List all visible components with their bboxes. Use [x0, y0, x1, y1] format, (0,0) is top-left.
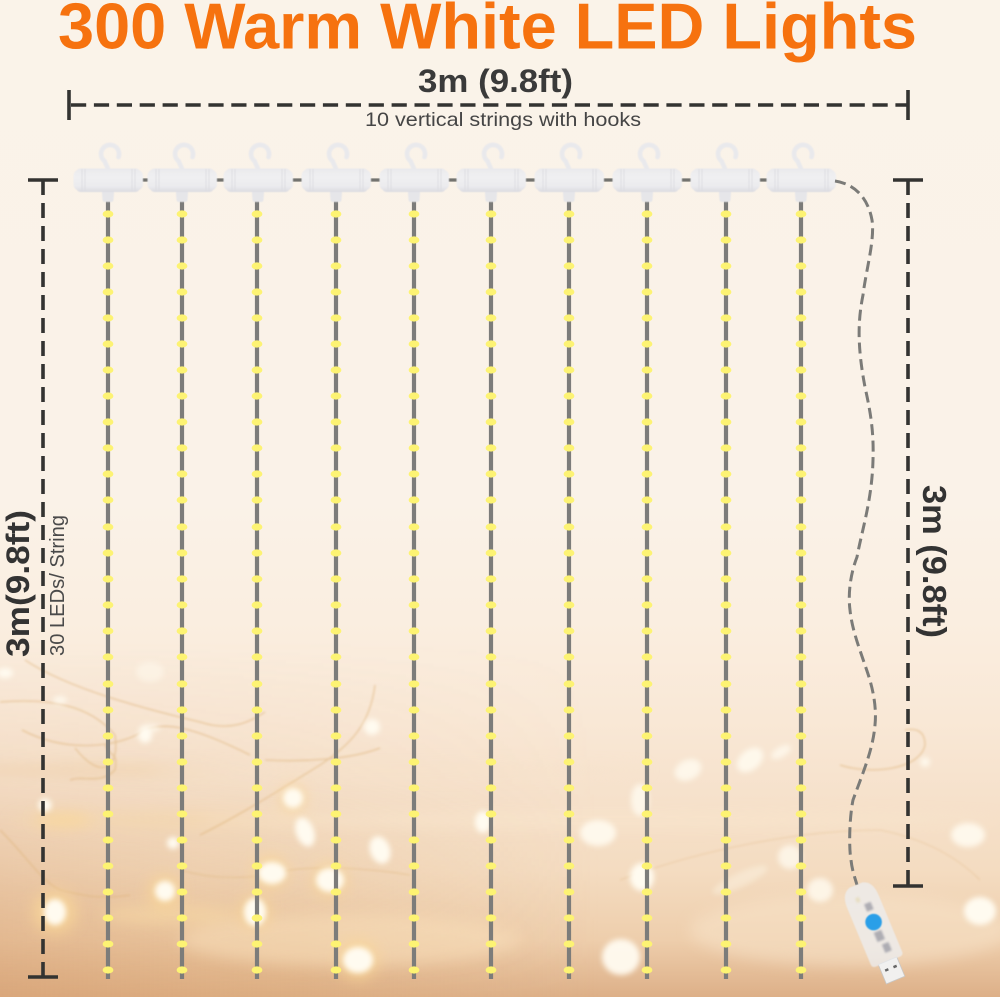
translucent controller body	[840, 878, 904, 968]
LED string 4	[331, 200, 341, 979]
LED string 3	[252, 200, 262, 979]
horizontal dimension arrow	[69, 90, 908, 120]
LED string 5	[409, 200, 419, 979]
USB plug	[878, 957, 905, 984]
LED string 7	[564, 200, 574, 979]
hook connector 10	[766, 145, 836, 202]
width label: 3m (9.8ft): 3m (9.8ft)	[418, 63, 573, 99]
LED string 8	[642, 200, 652, 979]
hook connector 5	[380, 145, 449, 202]
hook connector 9	[690, 145, 760, 202]
USB controller with blue button	[840, 878, 911, 987]
right label: 3m (9.8ft): 3m (9.8ft)	[916, 485, 953, 638]
right vertical dimension arrow	[893, 180, 923, 886]
left label: 3m(9.8ft): 3m(9.8ft)	[0, 510, 36, 657]
hook connector 8	[612, 145, 682, 202]
blue button	[863, 911, 884, 933]
dashed USB cable	[835, 181, 875, 885]
hook connector 7	[534, 145, 604, 202]
circuit chips	[855, 893, 892, 956]
LED string 9	[721, 200, 731, 979]
subtitle: 10 vertical strings with hooks: 10 vertical strings with hooks	[365, 109, 641, 131]
LED string 2	[177, 200, 187, 979]
horizontal connecting wire	[108, 178, 801, 182]
left sublabel: 30 LEDs/ String: 30 LEDs/ String	[47, 515, 69, 656]
hook connector 4	[302, 145, 371, 202]
hook connector 2	[148, 145, 217, 202]
hook connector 1	[74, 145, 143, 202]
LED string 10	[796, 200, 806, 979]
LED string 6	[486, 200, 496, 979]
hook connector 3	[224, 145, 293, 202]
left vertical dimension arrow	[28, 180, 58, 977]
LED string 1	[103, 200, 113, 979]
hook connector 6	[456, 145, 526, 202]
